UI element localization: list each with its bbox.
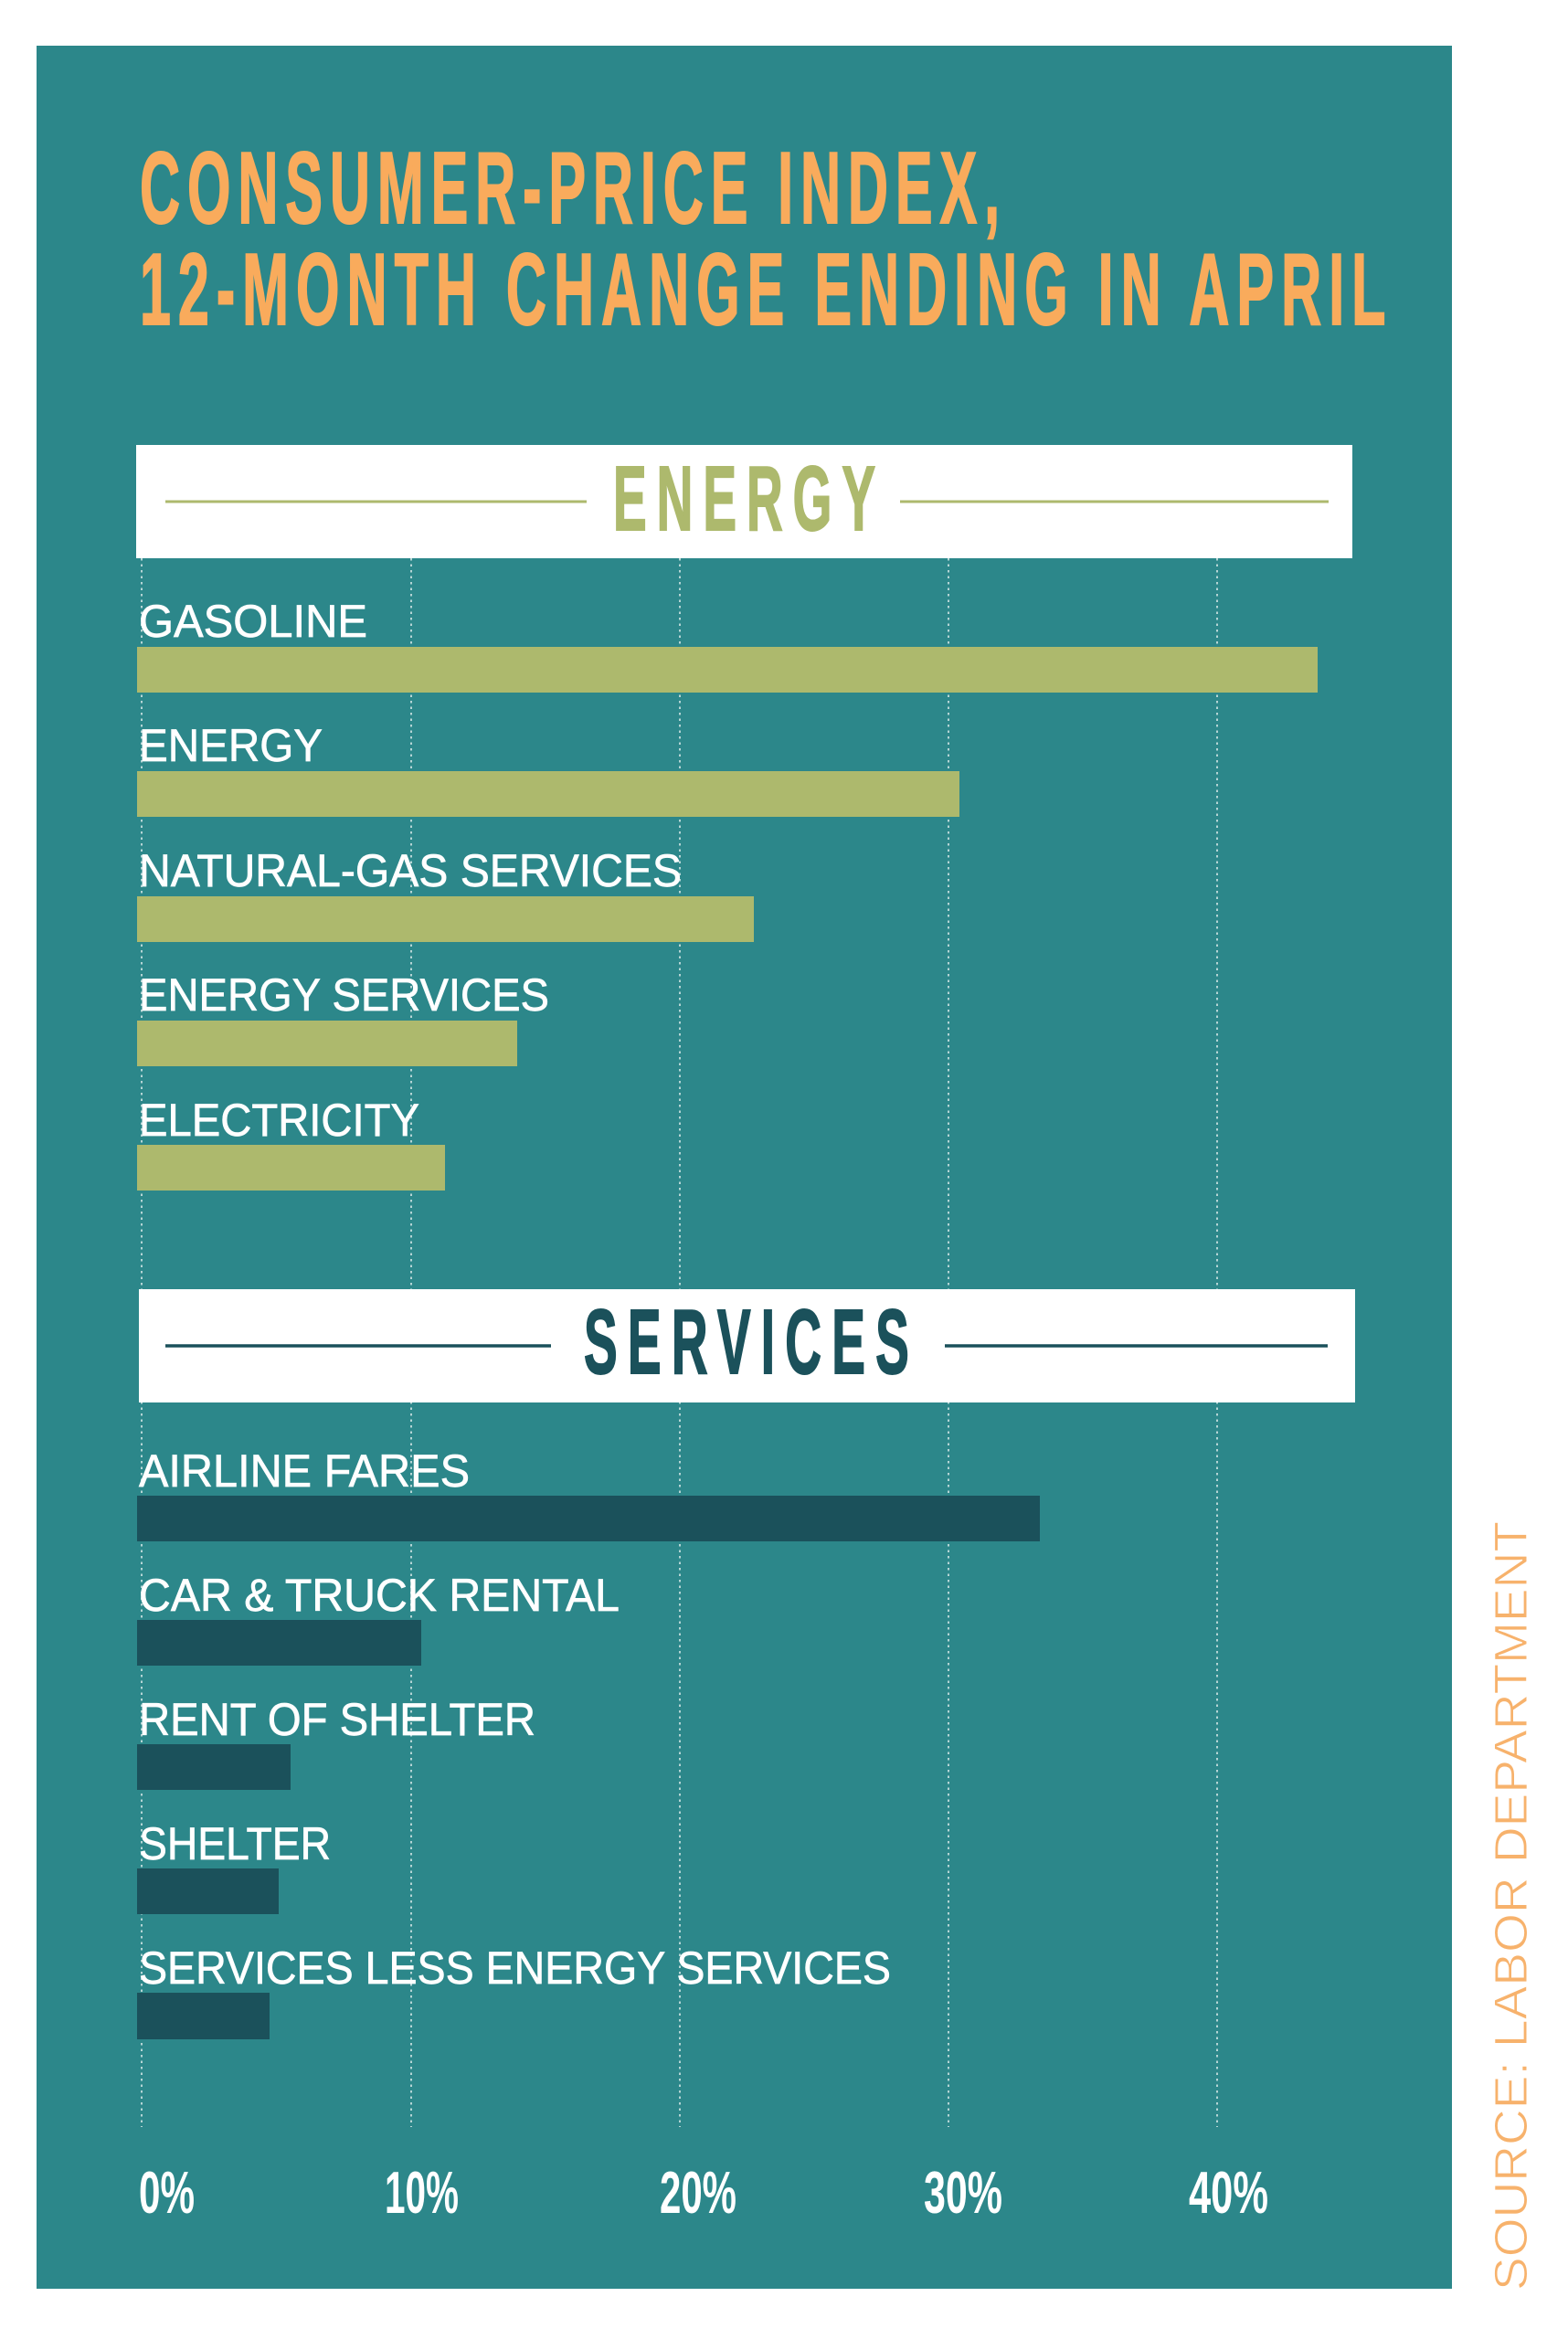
bar: services less energy services: SERVICES LESS ENERGY SERVICES <box>139 1942 891 1994</box>
bar: rent of shelter <box>137 1694 535 1790</box>
title <box>140 132 1385 346</box>
services bar chart <box>137 1445 1040 2039</box>
panel: energy header: ENERGY <box>613 449 875 550</box>
panel: services header: SERVICES <box>584 1292 909 1393</box>
bar: airline fares: AIRLINE FARES <box>139 1445 470 1497</box>
bar: electricity: ELECTRICITY <box>139 1095 419 1146</box>
source note: SOURCE: LABOR DEPARTMENT <box>1485 1521 1537 2291</box>
bar: natural-gas services: NATURAL-GAS SERVICES <box>139 845 682 896</box>
axis labels: 10% <box>385 2159 459 2226</box>
axis labels: 20% <box>660 2159 736 2226</box>
axis labels: 30% <box>924 2159 1002 2226</box>
bar: shelter <box>137 1818 331 1914</box>
panel: energy header <box>136 445 1352 558</box>
axis labels <box>139 2159 1268 2226</box>
bar: gasoline <box>137 596 1318 693</box>
bar: natural-gas services <box>137 845 754 942</box>
title: CONSUMER-PRICE INDEX, <box>140 132 1000 245</box>
panel: services header <box>139 1289 1355 1402</box>
bar: gasoline: GASOLINE <box>139 596 367 647</box>
bar: services less energy services <box>137 1942 891 2039</box>
bar: electricity <box>137 1095 445 1191</box>
bar: rent of shelter: RENT OF SHELTER <box>139 1694 535 1745</box>
bar: energy services: ENERGY SERVICES <box>139 969 549 1021</box>
energy bar chart <box>137 596 1318 1191</box>
bar: car and truck rental: CAR & TRUCK RENTAL <box>139 1570 620 1621</box>
bar: energy <box>137 720 959 817</box>
bar: shelter: SHELTER <box>139 1818 331 1869</box>
axis labels: 0% <box>139 2159 195 2226</box>
bar: airline fares <box>137 1445 1040 1541</box>
title: 12-MONTH CHANGE ENDING IN APRIL <box>140 233 1385 346</box>
bar: energy services <box>137 969 549 1066</box>
axis labels: 40% <box>1189 2159 1268 2226</box>
bar: car and truck rental <box>137 1570 620 1666</box>
bar: energy: ENERGY <box>139 720 323 771</box>
